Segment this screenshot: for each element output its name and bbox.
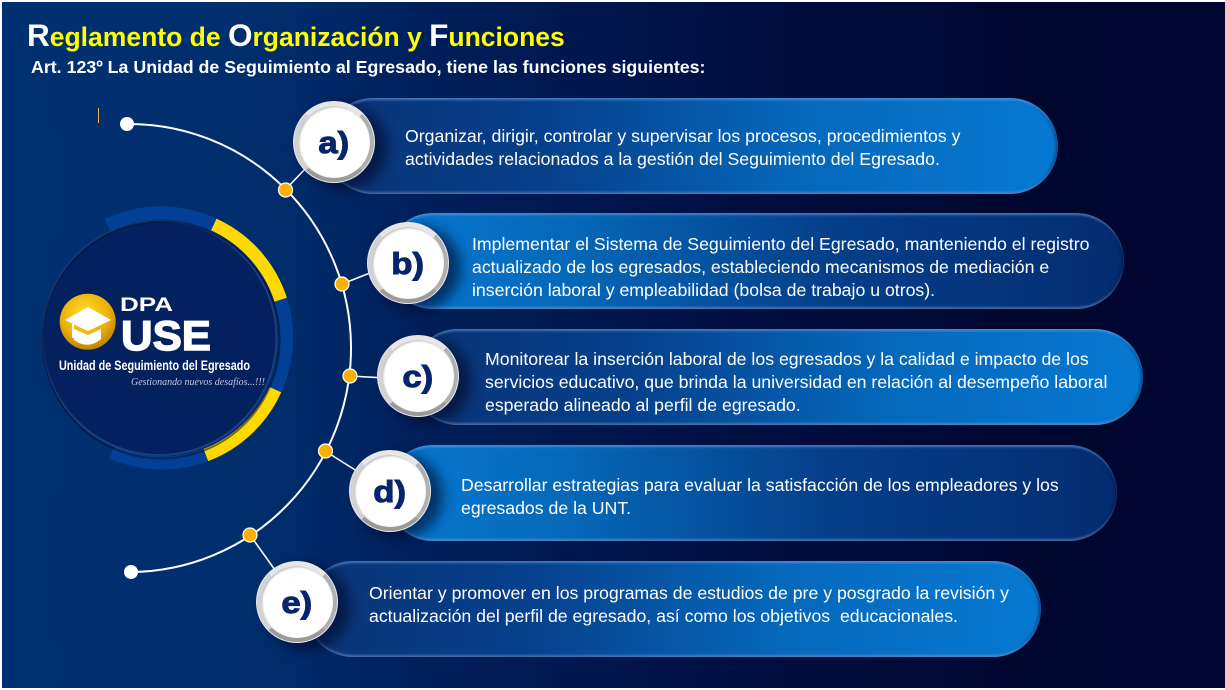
text d: Desarrollar estrategias para evaluar la satisfacción de los empleadores y los	[461, 475, 1059, 495]
text c: esperado alineado al perfil de egresado.	[485, 395, 801, 415]
logo badge: Unidad de Seguimiento del Egresado	[59, 357, 250, 373]
text b: actualizado de los egresados, estableciendo mecanismos de mediación e	[472, 257, 1049, 277]
text b: inserción laboral y empleabilidad (bolsa de trabajo u otros).	[472, 280, 935, 300]
text c: servicios educativo, que brinda la universidad en relación al desempeño laboral	[485, 372, 1107, 392]
badge a: a)	[319, 125, 349, 160]
text c	[485, 349, 1107, 415]
text e	[369, 583, 1009, 626]
logo badge: Gestionando nuevos desafíos...!!!	[131, 376, 265, 388]
title: Reglamento de Organización y Funciones	[27, 17, 565, 53]
text b	[472, 234, 1089, 300]
panel: b	[404, 213, 1124, 309]
text d: egresados de la UNT.	[461, 498, 631, 518]
badge c	[378, 336, 458, 416]
panel: d	[402, 445, 1117, 541]
badge b: b)	[392, 246, 424, 281]
text d	[461, 475, 1059, 518]
text c: Monitorear la inserción laboral de los egresados y la calidad e impacto de los	[485, 349, 1089, 369]
badge a	[294, 102, 374, 182]
inner disc	[42, 221, 276, 455]
panel: c	[430, 329, 1143, 425]
text a: actividades relacionados a la gestión del Seguimiento del Egresado.	[405, 149, 940, 169]
badge d	[350, 451, 430, 531]
logo text: DPA	[120, 294, 173, 316]
ring segments	[108, 213, 287, 463]
badge d: d)	[374, 474, 406, 509]
badge e: e)	[282, 585, 312, 620]
badge e	[257, 562, 337, 642]
text b: Implementar el Sistema de Seguimiento del Egresado, manteniendo el registro	[472, 234, 1089, 254]
subtitle: Art. 123º La Unidad de Seguimiento al Egresado, tiene las funciones siguientes:	[31, 57, 705, 77]
panel: a	[342, 98, 1058, 194]
panel: e	[316, 561, 1041, 657]
badge c: c)	[403, 359, 433, 394]
small orange tick	[98, 108, 99, 123]
logo badge: USE	[121, 312, 211, 359]
text e: actualización del perfil de egresado, así como los objetivos educacionales.	[369, 606, 958, 626]
text e: Orientar y promover en los programas de estudios de pre y posgrado la revisión y	[369, 583, 1009, 603]
badge b	[368, 223, 448, 303]
text a	[405, 126, 960, 169]
text a: Organizar, dirigir, controlar y supervisar los procesos, procedimientos y	[405, 126, 960, 146]
icon: graduation cap	[60, 294, 116, 350]
